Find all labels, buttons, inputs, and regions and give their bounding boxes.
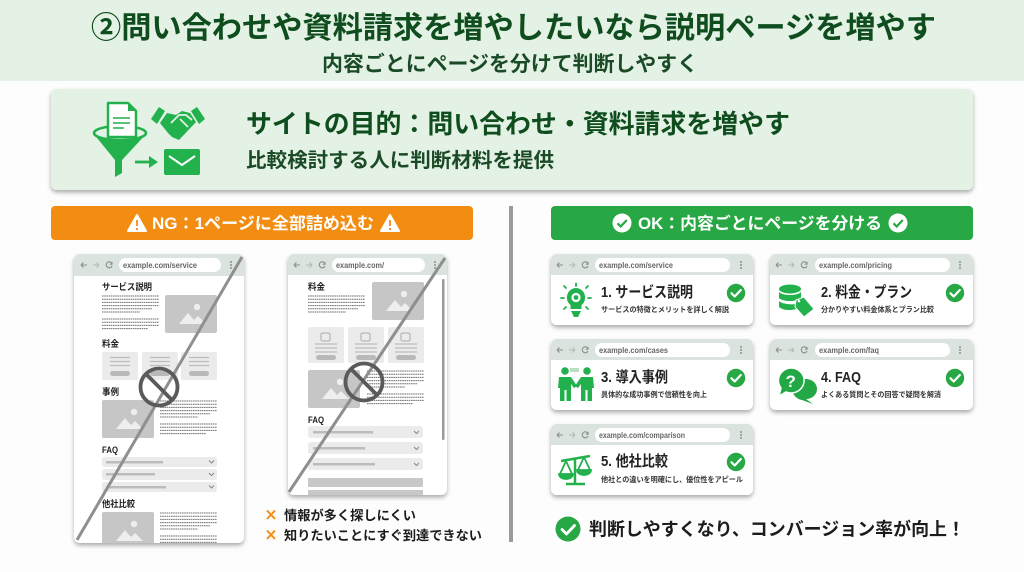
subtitle: 内容ごとにページを分けて判断しやすく	[322, 52, 698, 76]
card: service: サービスの特徴とメリットを詳しく解説	[601, 305, 730, 314]
icon: light bulb	[561, 284, 591, 317]
card: service: 1. サービス説明	[601, 283, 693, 301]
icon: two people	[558, 367, 594, 401]
browser: crowded top page: example.com/	[336, 260, 385, 270]
browser: long single page: FAQ	[102, 445, 118, 455]
panel subheading: 比較検討する人に判断材料を提供	[246, 149, 554, 172]
card: pricing: example.com/pricing	[819, 260, 892, 270]
icon: balance scale	[559, 456, 591, 484]
NG banner	[51, 206, 473, 240]
card: service	[551, 254, 753, 325]
card: comparison	[551, 424, 753, 495]
NG banner: NG：1ページに全部詰め込む	[152, 213, 374, 233]
browser: long single page: サービス説明	[102, 281, 152, 292]
icon: prohibited	[140, 368, 178, 406]
card: comparison: example.com/comparison	[599, 430, 685, 440]
browser: crowded top page	[288, 254, 447, 496]
card: cases	[551, 339, 753, 410]
card: FAQ	[770, 339, 973, 410]
browser: crowded top page: 料金	[308, 281, 325, 292]
card: pricing: 分かりやすい料金体系とプラン比較	[821, 305, 935, 314]
icon: speech bubbles	[778, 368, 817, 404]
browser: crowded top page: FAQ	[308, 415, 324, 425]
browser: long single page: 料金	[102, 338, 119, 349]
problem list	[267, 507, 482, 543]
card: cases: 3. 導入事例	[601, 368, 668, 386]
card: FAQ: 4. FAQ	[821, 369, 861, 386]
card: pricing: 2. 料金・プラン	[821, 283, 912, 301]
browser: long single page: 事例	[102, 386, 119, 397]
icon: arrow to envelope	[135, 149, 200, 175]
browser: long single page: example.com/service	[123, 260, 197, 270]
OK banner	[551, 206, 973, 240]
problem list: 情報が多く探しにくい	[284, 507, 416, 523]
card: comparison: 5. 他社比較	[601, 452, 668, 470]
card: FAQ: よくある質問とその回答で疑問を解消	[821, 390, 941, 399]
icon: coins and tag	[779, 284, 814, 317]
problem list: 知りたいことにすぐ到達できない	[284, 527, 482, 543]
icon: handshake	[151, 107, 205, 140]
card: cases: example.com/cases	[599, 345, 668, 355]
panel heading: サイトの目的：問い合わせ・資料請求を増やす	[246, 109, 790, 139]
card: pricing	[770, 254, 973, 325]
icon: warning right	[381, 215, 399, 231]
strike line	[77, 257, 242, 540]
icon: check	[556, 516, 580, 542]
OK banner: OK：内容ごとにページを分ける	[638, 213, 882, 233]
icon: check right	[888, 214, 908, 232]
strike line	[289, 258, 445, 492]
browser: long single page	[74, 254, 244, 550]
panel: site purpose	[51, 89, 973, 190]
title: ②問い合わせや資料請求を増やしたいなら説明ページを増やす	[91, 12, 936, 45]
browser: long single page: 他社比較	[102, 498, 135, 509]
conclusion: 判断しやすくなり、コンバージョン率が向上！	[589, 518, 965, 540]
icon: funnel with document	[93, 103, 147, 177]
card: comparison: 他社との違いを明確にし、優位性をアピール	[601, 475, 743, 484]
icon: speech bubbles: ?	[786, 372, 796, 391]
card: FAQ: example.com/faq	[819, 345, 879, 355]
card: cases: 具体的な成功事例で信頼性を向上	[601, 390, 707, 399]
icon: check left	[612, 214, 632, 232]
icon: prohibited	[346, 364, 382, 400]
header band	[0, 0, 1024, 81]
card: service: example.com/service	[599, 260, 673, 270]
icon: warning left	[128, 215, 146, 231]
